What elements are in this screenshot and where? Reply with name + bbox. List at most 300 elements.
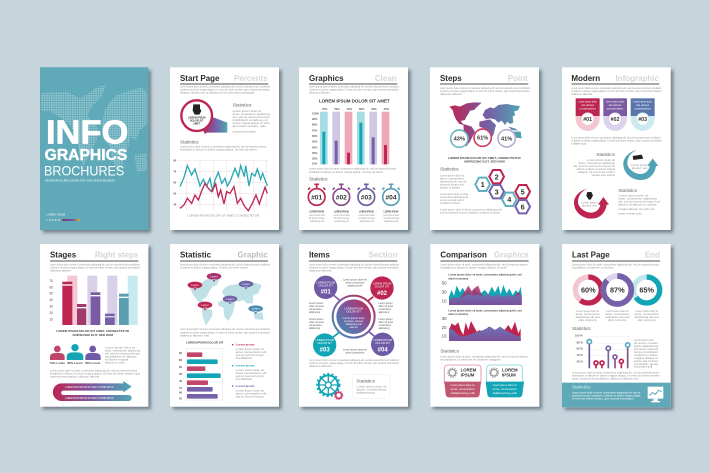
donut charts: 87% xyxy=(610,286,625,295)
cover title: BROCHURES xyxy=(44,163,124,179)
gradient world map xyxy=(449,102,522,147)
callout: hand circle with gradient tail: DOLOR SIT xyxy=(190,119,204,122)
card: teal: Lorem ipsum dolor sit xyxy=(493,383,517,387)
stacked bar chart: 40 xyxy=(49,298,53,302)
hub and spoke diagram: LOREM IPSUM xyxy=(344,306,363,310)
surrounding text blocks: Lorem ipsum xyxy=(378,302,393,305)
statistics text: Statistics xyxy=(440,166,459,171)
heading: Modern xyxy=(571,74,600,83)
statistics box: adipiscing xyxy=(356,390,375,394)
lollipop chart: 100 % xyxy=(575,334,583,338)
stopwatch captions: adipiscing elit xyxy=(384,219,399,223)
surrounding text blocks: consectetur xyxy=(309,324,322,327)
U-turn arrow: LOREM IPSUM DOLOR SIT AMET, CONSECTETUR xyxy=(65,396,114,400)
card: red: LOREM xyxy=(461,368,477,373)
panel: statistic page xyxy=(170,244,279,407)
stacked bar chart: 60 xyxy=(49,286,53,290)
area chart 1: diam nonummy xyxy=(448,276,469,280)
cover title: INFO xyxy=(46,114,128,151)
map caption xyxy=(448,156,522,164)
intro text: ut labore et dolore magna aliqua. Ut enim ad minim veniam, quis nostrud exercitation xyxy=(180,88,270,92)
chart side text: tetur adipiscing xyxy=(634,344,659,348)
statistics text right: nostrud exercitation xyxy=(233,129,256,133)
line chart xyxy=(173,159,268,217)
bar chart: 10% xyxy=(312,162,318,166)
surrounding text blocks: amet consectetur xyxy=(345,281,365,284)
people icons: 50% Lorem xyxy=(85,361,101,365)
intro text: ullamco laboris. xyxy=(440,92,463,96)
statistics text: didunt ut labore xyxy=(440,185,460,189)
area chart 2: 10 xyxy=(442,334,447,339)
area chart 1: 10 xyxy=(442,298,447,303)
numbered cards: sit amet xyxy=(636,103,649,107)
intro text xyxy=(440,86,530,96)
statistics text: amet, consectetur xyxy=(440,176,464,180)
stopwatch captions xyxy=(309,209,400,223)
intro text: ut labore et dolore magna aliqua. Ut enim ad minim veniam, quis nostrud exercitation xyxy=(50,266,140,270)
callout: hand circle with gradient tail: LOREM IPSUM xyxy=(188,116,205,119)
area chart 1: 30 xyxy=(442,289,447,294)
statistics box xyxy=(353,374,390,398)
stopwatch icons xyxy=(308,184,400,205)
stopwatch captions: Lorem ipsum dolor xyxy=(383,213,399,217)
map pins xyxy=(188,273,263,314)
numbered cards: sit amet xyxy=(609,103,622,107)
intro text: ullamco laboris. xyxy=(50,269,72,273)
intro text: Lorem ipsum dolor sit amet, consectetur adipiscing elit, sed do eiusmod tempor incididunt xyxy=(571,86,661,90)
hub and spoke diagram: LOREM IPSUM xyxy=(315,338,334,342)
people icons: 70% Lorem xyxy=(50,361,65,365)
footer band: Lorem ipsum dolor sit amet, consectetur adipiscing elit, sed do xyxy=(572,390,641,394)
heading: Steps xyxy=(440,74,462,83)
cover meta and colour strip: LOREM xyxy=(47,218,60,222)
stacked bar chart: 10 xyxy=(49,318,53,322)
body text xyxy=(571,135,662,145)
callout: hand circle with gradient tail: AMET xyxy=(193,122,201,125)
horizontal bar chart: 90 xyxy=(179,351,183,355)
chart caption: ADIPISCING ELIT, SED DOM xyxy=(72,333,114,337)
card: red: amet, consectetur xyxy=(451,387,475,391)
footer band xyxy=(562,383,671,407)
numbered hexagons: 2 xyxy=(495,172,499,181)
statistics text right: ad minim veniam, quis xyxy=(233,124,267,128)
numbered cards: sit amet xyxy=(581,103,594,107)
chart side text: nostrud xyxy=(634,365,653,369)
bar chart: 20% xyxy=(312,156,318,160)
statistics text: Statistics xyxy=(180,139,199,144)
donut captions: diam nonummy xyxy=(578,318,597,322)
hub and spoke diagram: #01 xyxy=(321,290,331,296)
hub and spoke diagram: #02 xyxy=(377,291,388,297)
intro text: Lorem ipsum dolor sit amet, consectetur adipiscing elit, sed do eiusmod tempor incididunt xyxy=(440,86,530,90)
stopwatch captions: sit amet consec xyxy=(334,216,350,220)
bar chart: 50% xyxy=(334,107,340,111)
horizontal bar chart: 20 xyxy=(179,397,183,401)
surrounding text blocks: dolor sit amet xyxy=(309,321,324,324)
panel: graphics page xyxy=(299,67,408,230)
statistics heading: Statistics xyxy=(572,326,591,331)
statistics text: sed do eiusmod tempor xyxy=(440,198,464,202)
statistics text xyxy=(440,348,528,362)
surrounding text blocks: dolor sit amet xyxy=(309,305,324,308)
icon: gears xyxy=(317,374,343,399)
stopwatch captions: adipiscing elit xyxy=(360,219,374,223)
cover meta and colour strip: LOREM · IPSUM xyxy=(47,213,65,217)
heading: Items xyxy=(309,251,330,260)
stopwatch captions: sit amet consec xyxy=(309,216,325,220)
legend: Lorem ipsum xyxy=(236,384,255,388)
numbered hexagons xyxy=(475,170,530,213)
people text: amet, consectetur adipiscing xyxy=(105,348,140,352)
numbered hexagons: 4 xyxy=(507,195,512,204)
legend: Lorem ipsum dolor sit xyxy=(236,388,264,392)
cover title: INFOGRAPHICS BROCHURES FOR YOUR DESIGN BUSINESS xyxy=(45,179,115,183)
donut captions: diam nonummy xyxy=(608,318,627,322)
horizontal bar chart xyxy=(179,348,223,401)
body text: ut labore et dolore magna aliqua. Ut enim ad minim veniam, quis nostrud exercitation xyxy=(180,330,270,334)
statistics text: consectetur adipiscing elit xyxy=(440,195,469,199)
heading xyxy=(440,251,529,261)
heading: Start Page xyxy=(180,74,220,83)
bar chart: 40% xyxy=(312,145,318,149)
intro text xyxy=(309,85,399,95)
teal circular arrow with camera icon xyxy=(623,150,658,180)
footer band: eiusmod tempor incididunt ut labore et dolore magna aliqua xyxy=(572,393,641,397)
body text: nostrud exercitation ullamco laboris. xyxy=(50,375,100,379)
legend: amet consectetur elit xyxy=(236,371,267,375)
numbered cards: #01 xyxy=(583,117,592,123)
hub and spoke diagram: #03 xyxy=(320,348,330,354)
chart side text: elit sed do eiusmod xyxy=(634,347,658,351)
statistics text right: elit, sed do eiusmod tempor xyxy=(233,115,270,119)
icon: monitor with chart xyxy=(648,387,663,402)
statistics text: incididunt ut labore et dolore magna xyxy=(440,358,501,362)
heading xyxy=(571,74,660,84)
body text xyxy=(180,327,270,338)
legend: amet consectetur elit xyxy=(236,350,267,354)
donut captions: amet, consectetur xyxy=(605,312,629,316)
people icons: 80% Lorem xyxy=(67,361,83,365)
numbered cards: Lorem ipsum dolor xyxy=(606,100,624,104)
statistics text xyxy=(180,139,267,152)
people text: et dolore magna xyxy=(105,357,129,361)
surrounding text blocks: adipiscing xyxy=(309,311,321,314)
body text: incididunt ut labore et dolore magna aliqua. Ut enim ad minim veniam, quis xyxy=(50,372,141,376)
donut captions: amet, consectetur xyxy=(576,312,600,316)
surrounding text blocks: adipiscing elit xyxy=(348,284,363,287)
body text: ut labore et dolore magna aliqua. Ut enim ad minim veniam, quis nostrud exercitation xyxy=(571,138,662,142)
horizontal bar chart: 60 xyxy=(179,365,183,369)
panel: stages and statistic pages (bottom left group) xyxy=(40,244,279,407)
horizontal bar chart: 70 xyxy=(179,386,183,390)
statistics box: Lorem ipsum dolor sit xyxy=(356,385,387,389)
surrounding text blocks: dolor sit amet xyxy=(378,321,394,324)
cover title: GRAPHICS xyxy=(45,147,128,164)
numbered cards: consectetur xyxy=(579,106,596,110)
heading: Point xyxy=(508,74,528,83)
intro text: ut labore et dolore magna aliqua. Ut enim ad minim veniam xyxy=(180,266,249,270)
body text: Lorem ipsum dolor sit amet, consectetur adipiscing elit, sed do eiusmod tempor incididunt xyxy=(571,135,661,139)
stopwatch icons: #02 xyxy=(336,194,347,201)
people text: elit, sed do eiusmod tempor xyxy=(105,351,140,355)
hub and spoke diagram: DOLOR SIT xyxy=(376,341,390,345)
body text: ullamco. xyxy=(571,141,588,145)
legend: incididunt xyxy=(236,356,253,360)
surrounding text blocks: dolor sit amet xyxy=(378,305,394,308)
card: red: IPSUM xyxy=(461,373,475,378)
stopwatch captions: Lorem ipsum dolor xyxy=(309,213,325,217)
chart heading: LOREM IPSUM DOLOR SIT xyxy=(186,340,223,344)
statistics text: Statistics xyxy=(618,188,638,193)
heading xyxy=(180,251,268,261)
lollipop chart: 60 % xyxy=(577,347,583,351)
stopwatch icons: #04 xyxy=(385,194,397,201)
lollipop chart: 20 % xyxy=(577,359,583,363)
statistics heading: Statistics xyxy=(309,177,328,182)
card: teal: IPSUM xyxy=(502,373,516,378)
intro text: ullamco laboris. xyxy=(309,91,331,95)
map pins: Lorem xyxy=(242,282,251,286)
donut captions: Lorem ipsum dolor sit xyxy=(606,309,629,313)
panel: last page xyxy=(562,244,671,407)
body text: Lorem ipsum dolor sit amet, consectetur adipiscing elit, sed do eiusmod tempor xyxy=(50,369,137,373)
card: teal: amet, consectetur xyxy=(493,387,517,391)
percent circles: 43% xyxy=(454,137,465,143)
panel: start page xyxy=(170,67,279,230)
teal circular arrow with camera icon: Lorem ipsum xyxy=(631,163,648,167)
body text: ut labore et dolore magna aliqua. Ut enim ad minim veniam, quis nostrud exercitation xyxy=(309,361,399,365)
map pins: Lorem xyxy=(201,303,210,307)
heading: Graphic xyxy=(237,251,268,260)
area chart 2: 20 xyxy=(442,325,447,330)
bar chart: 70% xyxy=(312,128,318,132)
map pins: Lorem xyxy=(210,274,219,278)
surrounding text blocks: Lorem ipsum xyxy=(309,302,323,305)
heading: Percents xyxy=(234,74,268,83)
line chart: 80 xyxy=(173,159,177,163)
statistics box: amet, consectetur xyxy=(356,387,386,391)
area chart 1: 50 xyxy=(442,280,447,285)
hub and spoke diagram: DOLOR SIT xyxy=(375,284,390,288)
surrounding text blocks: Lorem ipsum xyxy=(309,318,323,321)
body text xyxy=(309,358,399,368)
statistics text right: Statistics xyxy=(233,102,252,107)
bar chart: 70% xyxy=(322,107,328,111)
statistics text: incididunt ut labore et dolore magna aliqua. Ut enim ad minim xyxy=(180,148,257,152)
legend: Lorem ipsum dolor sit xyxy=(236,347,264,351)
area chart 2: diam nonummy xyxy=(448,312,469,316)
statistics text right aligned xyxy=(573,152,616,177)
stacked bar chart: 50 xyxy=(49,292,53,296)
heading: Graphics xyxy=(494,251,529,260)
hub and spoke diagram: LOREM IPSUM xyxy=(373,281,391,285)
line chart: 40 xyxy=(173,202,177,206)
stopwatch captions: Lorem ipsum dolor xyxy=(334,213,350,217)
numbered cards: consectetur xyxy=(634,106,651,110)
statistics text xyxy=(440,166,502,215)
stopwatch captions: Lorem ipsum dolor xyxy=(359,213,375,217)
chart side text: magna aliqua ut xyxy=(634,356,658,360)
panel: cover and start page (top left group) xyxy=(40,67,279,230)
surrounding text blocks: adipiscing xyxy=(309,327,321,330)
horizontal bar chart: 80 xyxy=(179,358,183,362)
card: teal: adipiscing elit xyxy=(493,391,517,395)
panel: stages page xyxy=(40,244,148,407)
legend xyxy=(232,343,267,398)
line chart: 70 xyxy=(173,170,177,174)
intro text: Lorem ipsum dolor sit amet, consectetur adipiscing elit, sed do eiusmod tempor xyxy=(440,263,528,267)
numbered cards: consectetur xyxy=(607,106,623,110)
intro text: ut labore et dolore magna aliqua. Ut enim ad minim veniam, quis nostrud exercitation xyxy=(571,89,662,93)
legend: amet consectetur elit xyxy=(236,391,267,395)
donut captions xyxy=(576,309,659,322)
statistics text: minim veniam quis xyxy=(618,211,642,215)
stacked bar chart: 30 xyxy=(49,304,53,308)
stacked bar chart: 70 xyxy=(49,279,53,283)
bar chart xyxy=(312,107,390,166)
surrounding text blocks: Lorem ipsum xyxy=(378,318,393,321)
hub and spoke diagram: LOREM IPSUM xyxy=(316,281,335,285)
people icons xyxy=(50,344,101,365)
statistics text: Lorem ipsum dolor sit xyxy=(440,173,464,177)
area chart 2: Lorem ipsum dolor sit amet, consectetur adipiscing elit, sed xyxy=(448,308,522,312)
bar chart: 60% xyxy=(312,134,318,138)
footer band: Statistics xyxy=(572,384,591,389)
chart caption: LOREM IPSUM DOLOR SIT AMET, CONSECTETUR xyxy=(56,329,130,333)
people text: Lorem ipsum dolor sit xyxy=(105,345,135,349)
heading: Infographic xyxy=(616,74,660,83)
area chart 1 xyxy=(442,273,522,305)
percent circles xyxy=(451,129,515,147)
stacked bar chart: 20 xyxy=(49,311,53,315)
percent circles: 41% xyxy=(501,136,512,142)
bar chart: 50% xyxy=(371,107,377,111)
heading xyxy=(440,74,528,84)
body text xyxy=(50,369,141,379)
people text xyxy=(105,345,140,364)
bar chart: 20% xyxy=(347,107,353,111)
statistics text right aligned: amet, consectetur adipiscing xyxy=(578,161,615,165)
statistics text: Lorem ipsum dolor sit amet xyxy=(440,192,469,196)
hub and spoke diagram: LOREM IPSUM xyxy=(373,338,392,342)
chart heading: LOREM IPSUM DOLOR SIT AMET xyxy=(319,98,390,103)
bar chart: 80% xyxy=(359,107,365,111)
statistics text xyxy=(618,188,660,215)
body text: ullamco laboris. xyxy=(309,364,333,368)
statistics text right: Lorem ipsum dolor sit xyxy=(233,109,261,113)
hub and spoke diagram: adipiscing elit xyxy=(346,322,362,326)
surrounding text blocks: adipiscing xyxy=(378,327,390,330)
donut captions: amet, consectetur xyxy=(635,312,659,316)
intro text: Lorem ipsum dolor sit amet, consectetur adipiscing elit, sed do eiusmod tempor incididunt xyxy=(50,263,140,267)
area chart 2 xyxy=(442,308,522,341)
surrounding text blocks xyxy=(309,278,394,355)
statistics box: Statistics xyxy=(356,379,376,384)
surrounding text blocks: consectetur xyxy=(378,308,391,311)
red circular arrow with icon xyxy=(574,189,609,219)
body text: Lorem ipsum dolor sit amet, consectetur adipiscing elit, sed do eiusmod tempor incididunt xyxy=(309,358,399,362)
statistics text: Lorem ipsum dolor sit amet, consectetur adipiscing elit, sed do eiusmod tempor xyxy=(180,145,267,149)
lollipop chart xyxy=(575,334,630,368)
intro text: ullamco laboris nisi ut aliquip ex ea commodo consequat. xyxy=(180,91,255,95)
caption text: incididunt ut labore et dolore magna aliqua. Ut enim ad minim xyxy=(309,170,384,174)
map caption: LOREM IPSUM DOLOR SIT AMET, CONSECTETUR xyxy=(448,156,522,160)
statistics text: eiusmod tempor inci xyxy=(440,182,464,186)
body text: incididunt ut labore et dolore magna aliqua. Ut enim ad minim veniam xyxy=(572,374,660,378)
stopwatch captions: sit amet consec xyxy=(383,216,400,220)
map pins: Lorem xyxy=(226,297,235,301)
red circular arrow with icon: dolor sit xyxy=(582,204,597,208)
intro text: incididunt ut labore et dolore magna aliqua. Ut enim xyxy=(440,266,508,270)
statistics text: Lorem ipsum dolor sit xyxy=(618,194,649,198)
panel: modern infographic page xyxy=(562,67,671,230)
panel: comparison page xyxy=(430,244,539,407)
donut captions: adipiscing elit sed xyxy=(576,315,600,319)
legend: sed do eiusmod tempor xyxy=(236,394,264,398)
surrounding text blocks: adipiscing xyxy=(378,311,390,314)
surrounding text blocks: consectetur xyxy=(378,324,391,327)
stopwatch icons: #01 xyxy=(311,194,323,201)
heading: Comparison xyxy=(440,251,487,260)
intro text xyxy=(440,263,528,270)
statistics text right aligned: didunt ut labore et dolore magna xyxy=(577,167,615,171)
intro text xyxy=(180,85,270,95)
chart side text: enim ad minim xyxy=(634,359,659,363)
panel: items and comparison pages (bottom middle group) xyxy=(299,244,539,407)
hub and spoke diagram: #04 xyxy=(378,348,388,354)
map pins: Lorem xyxy=(191,283,200,287)
hub and spoke diagram: DOLOR SIT xyxy=(319,284,333,288)
panel: cover xyxy=(40,67,148,230)
bar chart: 90% xyxy=(312,117,318,121)
heading xyxy=(309,74,397,84)
stopwatch captions: sit amet consec xyxy=(359,216,375,220)
heading: Last Page xyxy=(572,251,610,260)
bar chart: 100% xyxy=(312,111,319,115)
map caption: ADIPISCING ELIT, SED DOM xyxy=(464,160,505,164)
bar chart: 30% xyxy=(312,151,318,155)
statistics text right xyxy=(233,102,271,133)
stopwatch captions: adipiscing elit xyxy=(310,219,324,223)
legend: Lorem ipsum dolor sit xyxy=(236,368,264,372)
donut charts: 60% xyxy=(581,286,596,295)
intro text: Lorem ipsum dolor sit amet, consectetur adipiscing elit, sed do eiusmod tempor incididunt xyxy=(309,85,399,89)
body text: Lorem ipsum dolor sit amet, consectetur adipiscing elit, sed do eiusmod tempor incididunt xyxy=(180,327,270,331)
teal circular arrow with camera icon: dolor sit xyxy=(632,166,647,170)
hub and spoke diagram: sit amet, consec xyxy=(344,319,364,323)
heading xyxy=(309,251,397,261)
panel: graphics and steps pages (top middle group) xyxy=(299,67,539,230)
chart side text: veniam quis xyxy=(634,362,659,366)
intro text xyxy=(571,86,662,96)
intro text: Lorem ipsum dolor sit amet, consectetur adipiscing elit, sed do eiusmod tempor xyxy=(572,263,659,267)
statistics text right aligned: Lorem ipsum dolor sit xyxy=(587,158,615,162)
cover title xyxy=(44,114,128,183)
intro text: incididunt ut labore et dolore xyxy=(572,266,614,270)
statistics text: magna aliqua. Ut enim ad xyxy=(618,207,655,211)
footer band: Ut enim ad minim veniam, quis nostrud exercitation xyxy=(572,396,634,400)
chart side text: Lorem ipsum dolor xyxy=(634,338,654,342)
dotted world map xyxy=(41,85,147,173)
heading xyxy=(180,74,268,84)
surrounding text blocks: amet consectetur xyxy=(345,352,365,355)
donut captions: adipiscing elit sed xyxy=(605,315,630,319)
intro text: ut labore et dolore magna aliqua. Ut enim ad minim veniam, quis nostrud exercitation xyxy=(440,89,530,93)
U-turn arrow xyxy=(53,381,132,401)
intro text xyxy=(180,263,270,270)
intro text xyxy=(309,263,399,273)
heading: Stages xyxy=(50,251,77,260)
